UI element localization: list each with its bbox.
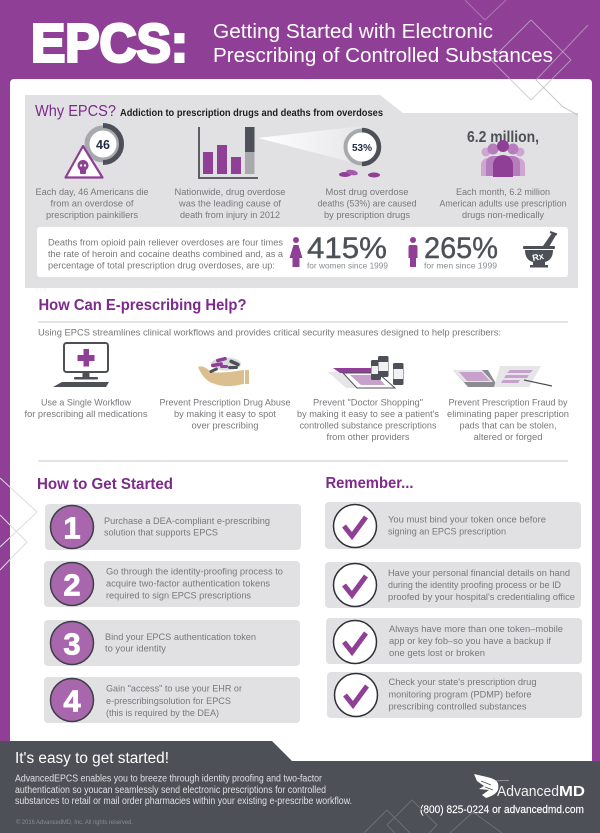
icon: documents and pill bottles (328, 356, 404, 388)
heading: why EPCS: Why EPCS? (35, 103, 116, 120)
logo: AdvancedMD: MD (559, 783, 585, 800)
caption: single workflow: Use a Single Workflow (41, 398, 131, 408)
intro text: Using EPCS streamlines clinical workflows and provides critical security measures designed to help prescribers: (38, 328, 501, 338)
callout text: the rate of heroin and cocaine deaths combined and, as a (48, 249, 284, 260)
panel: footer (0, 741, 600, 833)
panel: remember 4: Check your state's prescription drug (388, 677, 536, 688)
panel: remember 4 (327, 672, 582, 718)
caption: 46 Americans (36, 187, 148, 221)
callout text (48, 238, 284, 272)
caption: prescription fraud: altered or forged (474, 432, 542, 443)
panel: step 2: required to sign EPCS prescriptions (106, 590, 251, 602)
callout: opioid overdoses (37, 227, 568, 277)
icon: 53 percent ring and pills (339, 130, 380, 178)
caption: 6.2 million (440, 187, 566, 221)
footer body text: authentication so youcan seamlessly send electronic prescriptions for controlled (15, 785, 326, 796)
icon: mortar and pestle: Rx (531, 251, 545, 263)
panel: step 3 (44, 620, 300, 666)
contact details: (800) 825-0224 or advancedmd.com (420, 804, 584, 816)
callout text: percentage of total prescription drug overdoses, are up: (48, 260, 275, 272)
icon: 6.2 million people (467, 129, 539, 177)
panel: remember 4: prescribing controlled substances (388, 702, 527, 712)
caption: drug abuse (160, 398, 290, 432)
panel: step 4: 4 (63, 684, 81, 718)
heading: how to get started: How to Get Started (37, 476, 173, 493)
callout text: Deaths from opioid pain reliever overdoses are four times (48, 238, 283, 248)
caption: leading cause: death from injury in 2012 (180, 210, 280, 221)
panel: remember 3: Always have more than one token–mobile (389, 624, 563, 635)
subtitle: Prescribing of Controlled Substances (213, 44, 553, 67)
caption: 6.2 million: drugs non-medically (462, 210, 544, 221)
logo: AdvancedMD (474, 774, 585, 800)
caption: single workflow (24, 398, 148, 420)
panel: step 3: 3 (63, 626, 81, 662)
pill bottle (371, 360, 381, 380)
subtitle (213, 20, 553, 67)
icon: 53 percent ring and pills: 53% (352, 143, 372, 154)
caption: 53 percent: deaths (53%) are caused (318, 198, 416, 210)
caption: 53 percent: Most drug overdose (326, 187, 408, 198)
subtitle: Getting Started with Electronic (213, 20, 493, 43)
pill bottle (378, 356, 388, 377)
logo: AdvancedMD: Advanced (497, 783, 559, 800)
heading: why EPCS: Addiction to prescription drugs and deaths from overdoses (120, 108, 383, 119)
caption: 6.2 million: American adults use prescription (440, 198, 566, 210)
heading: why EPCS (35, 103, 383, 120)
panel: step 1: Purchase a DEA-compliant e-prescribing (104, 516, 270, 527)
panel: remember 2: Have your personal financial details on hand (388, 568, 570, 579)
footer heading: It's easy to get started! (15, 750, 169, 767)
stat: men: 265% (424, 232, 498, 265)
caption: 46 Americans: Each day, 46 Americans die (36, 187, 148, 198)
panel: step 2: 2 (63, 568, 81, 602)
panel: step 1: solution that supports EPCS (104, 528, 218, 538)
title: EPCS: EPCS: (31, 14, 188, 74)
caption: 46 Americans: from an overdose of (50, 198, 134, 210)
panel: remember 2: during the identity proofing process or be ID (388, 580, 561, 591)
panel: step 1 (45, 504, 301, 550)
icon: woman (290, 237, 302, 267)
footer body text: AdvancedEPCS enables you to breeze through identity proofing and two-factor (15, 774, 323, 784)
panel: step 4: (this is required by the DEA) (106, 708, 219, 719)
caption: doctor shopping: by making it easy to see a patient's (297, 409, 439, 420)
caption: prescription fraud: pads that can be stolen, (460, 420, 556, 432)
panel: remember 3: app or key fob–so you have a backup if (389, 636, 551, 647)
copyright: © 2016 AdvancedMD, Inc. All rights reserved. (16, 819, 133, 826)
panel: step 4: e-prescribingsolution for EPCS (106, 696, 231, 707)
caption: prescription fraud: Prevent Prescription Fraud by (448, 398, 568, 408)
stat: women: for women since 1999 (307, 260, 388, 270)
caption: drug abuse: over prescribing (192, 420, 258, 432)
spotlight beam (258, 126, 362, 165)
panel: remember 2: proofed by your hospital's credentialing office (388, 592, 575, 603)
pill bottle (393, 363, 404, 385)
panel: remember 1 (325, 502, 581, 549)
panel: remember 1: signing an EPCS prescription (388, 526, 506, 538)
panel: step 4 (44, 677, 300, 723)
caption: 53 percent (318, 187, 416, 221)
panel: step 1: 1 (63, 510, 81, 546)
icon: hand with pills (198, 357, 249, 386)
panel: remember 4: monitoring program (PDMP) before (388, 690, 532, 700)
caption: leading cause: was the leading cause of (178, 198, 281, 210)
footer body text (15, 774, 352, 807)
panel: why EPCS (25, 95, 578, 288)
caption: single workflow: for prescribing all medications (24, 409, 148, 420)
caption: 46 Americans: prescription painkillers (46, 210, 138, 221)
panel: remember 3: one gets lost or broken (389, 648, 485, 659)
heading: how can e-prescribing help: How Can E-prescribing Help? (38, 297, 246, 314)
caption: doctor shopping: controlled substance prescriptions (300, 420, 437, 432)
icon: mortar and pestle (523, 232, 557, 268)
caption: leading cause: Nationwide, drug overdose (174, 187, 286, 198)
stat: women: 415% (307, 232, 387, 265)
caption: 6.2 million: Each month, 6.2 million (456, 187, 550, 198)
panel: step 2: Go through the identity-proofing process to (106, 566, 283, 578)
caption: 53 percent: by prescription drugs (324, 210, 410, 221)
icon: ring and warning triangle: 46 (96, 138, 110, 152)
icon: prescription pads and pen (453, 366, 552, 387)
caption: prescription fraud (447, 398, 569, 443)
caption: doctor shopping (297, 398, 439, 443)
icon: monitor (53, 343, 109, 387)
icon: ring and warning triangle (66, 126, 122, 178)
heading: remember: Remember... (326, 475, 414, 492)
panel: step 3: to your identity (105, 644, 166, 654)
caption: drug abuse: Prevent Prescription Drug Abuse (160, 398, 290, 408)
panel: step 2: acquire two-factor authentication tokens (106, 578, 270, 590)
caption: leading cause (174, 187, 286, 221)
caption: doctor shopping: Prevent "Doctor Shopping" (313, 398, 423, 408)
title (31, 14, 553, 74)
icon: man (408, 237, 418, 267)
chart: bars (199, 127, 258, 178)
caption: drug abuse: by making it easy to spot (174, 409, 276, 420)
panel: step 2 (44, 561, 300, 607)
panel: remember 3 (326, 618, 582, 664)
panel: remember 2 (325, 562, 581, 608)
stat: men: for men since 1999 (424, 260, 497, 270)
icon: 6.2 million people: 6.2 million, (467, 129, 539, 146)
caption: doctor shopping: from other providers (326, 432, 410, 443)
caption: prescription fraud: eliminating paper prescription (447, 409, 569, 420)
panel: step 3: Bind your EPCS authentication token (105, 632, 256, 643)
panel: remember 1: You must bind your token once before (388, 514, 546, 526)
footer body text: substances to retail or mail order pharmacies within your existing e-prescribe workflow. (15, 796, 352, 807)
panel: step 4: Gain "access" to use your EHR or (106, 684, 243, 694)
